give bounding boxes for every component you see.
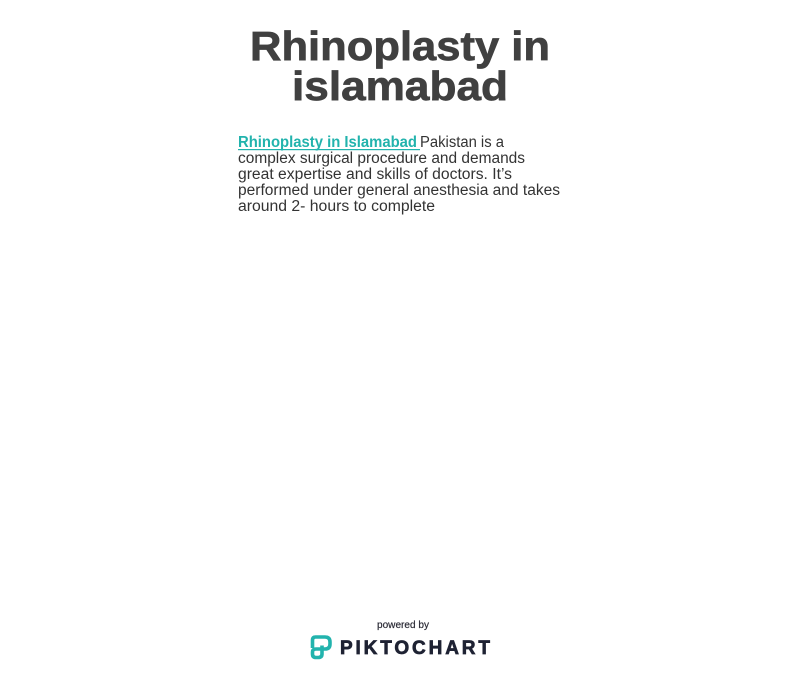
wordmark: PIKTOCHART	[340, 638, 490, 659]
text block: description: complex surgical procedure and demands	[238, 150, 525, 167]
text block: description: great expertise and skills of doctors. It’s	[238, 166, 512, 183]
powered by label: powered by	[377, 620, 429, 631]
footer: powered by Piktochart	[312, 620, 490, 659]
text block: description	[238, 134, 560, 215]
text block: description: performed under general anesthesia and takes	[238, 182, 560, 199]
title: Rhinoplasty in	[250, 23, 550, 69]
link: Rhinoplasty in Islamabad: Rhinoplasty in Islamabad	[238, 134, 417, 151]
icon: Piktochart logo	[312, 637, 330, 658]
title	[250, 23, 550, 109]
text block: description: Pakistan is a	[420, 134, 504, 151]
title: islamabad	[292, 63, 508, 109]
text block: description: around 2- hours to complete	[238, 198, 435, 215]
